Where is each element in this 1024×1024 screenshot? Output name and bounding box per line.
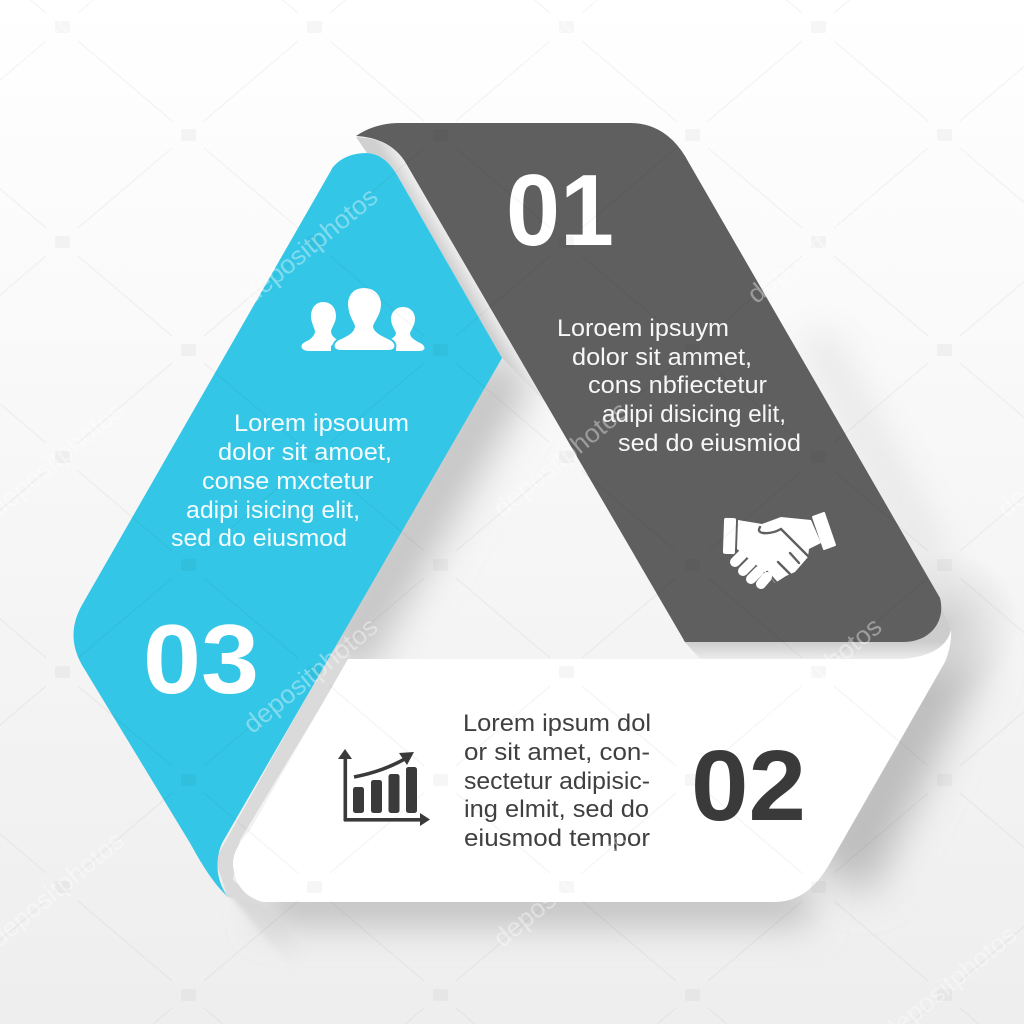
number 01: 01 (506, 155, 614, 267)
text block 02: sectetur adipisic- (464, 768, 650, 795)
number 03: 03 (143, 604, 259, 714)
text block 02: ing elmit, sed do (464, 796, 649, 823)
watermark text: depositphotos (237, 181, 383, 309)
fold shadow: between grey and white (683, 610, 951, 661)
text block 01: adipi disicing elit, (602, 401, 786, 428)
text block 03: dolor sit amoet, (218, 439, 392, 466)
fold shadow: between blue and white (215, 655, 352, 905)
text block 02: eiusmod tempor (464, 825, 650, 852)
watermark text: depositphotos (237, 611, 383, 739)
text block 01: dolor sit ammet, (572, 344, 752, 371)
long shadows (222, 330, 1020, 985)
white shape (233, 630, 951, 902)
icon: people (302, 287, 425, 351)
text block 03: sed do eiusmod (171, 525, 347, 552)
icon: handshake (723, 513, 835, 584)
text block 03 (171, 410, 409, 552)
watermark text: depositphotos (741, 181, 887, 309)
text block 01: sed do eiusmiod (618, 430, 801, 457)
text block 02: Lorem ipsum dol (463, 710, 651, 737)
text block 01: Loroem ipsuym (557, 315, 729, 342)
blue shape (74, 153, 502, 897)
panel 03: blue segment (74, 153, 502, 897)
panel 01: grey segment (356, 123, 941, 642)
icon: bar chart (338, 749, 430, 826)
text block 01: cons nbfiectetur (588, 372, 767, 399)
watermark text: depositphotos (487, 395, 633, 523)
text block 03: adipi isicing elit, (186, 497, 360, 524)
text block 02 (463, 710, 651, 852)
number 02: 02 (691, 730, 806, 842)
panel 02: white segment (233, 630, 951, 902)
text block 02: or sit amet, con- (464, 739, 650, 766)
text block 01 (557, 315, 801, 457)
text block 03: Lorem ipsouum (234, 410, 409, 437)
text block 03: conse mxctetur (202, 468, 373, 495)
grey shape (356, 123, 941, 642)
watermark text: depositphotos (741, 611, 887, 739)
fold shadow: between blue and grey (356, 137, 546, 403)
watermark text: depositphotos (487, 825, 633, 953)
